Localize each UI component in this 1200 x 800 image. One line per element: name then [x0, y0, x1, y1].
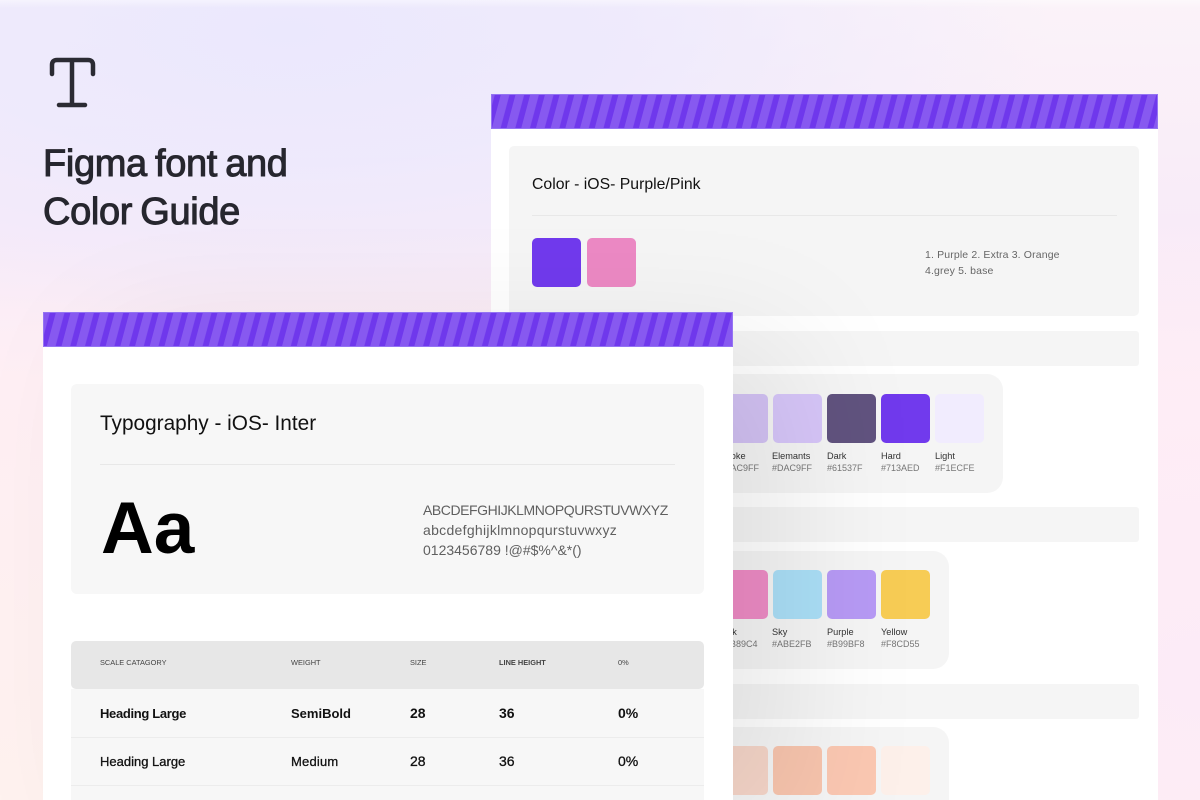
panel: purple palette tray: [640, 374, 1003, 493]
title: [43, 143, 288, 233]
row 1: category: Heading Large: [100, 706, 186, 721]
hex: elements: #DAC9FF: [772, 463, 812, 473]
swatch: peach 4: [881, 746, 930, 795]
glyph set: [423, 502, 668, 558]
swatch: peach 2: [773, 746, 822, 795]
section bar 1: [509, 331, 1139, 366]
swatch: light: [935, 394, 984, 443]
label: purple: Purple: [827, 627, 854, 637]
hex: dark: #61537F: [827, 463, 863, 473]
swatch: pink: [719, 570, 768, 619]
hex: purple: #B99BF8: [827, 639, 865, 649]
title: Color Guide: [43, 191, 240, 233]
label: light: Light: [935, 451, 955, 461]
swatch: sky: [773, 570, 822, 619]
panel: typography specimen: [71, 384, 704, 594]
panel: bright palette tray: [640, 551, 949, 669]
panel: typography card: [43, 312, 733, 800]
panel: color guide card: [491, 94, 1158, 800]
row 2: tracking: 0%: [618, 753, 638, 769]
glyph set: ABCDEFGHIJKLMNOPQURSTUVWXYZ: [423, 502, 668, 518]
color notes: [925, 249, 1060, 277]
striped header: color card: [491, 94, 1158, 129]
swatch: peach 3: [827, 746, 876, 795]
panel: color heading block: [509, 146, 1139, 316]
column: tracking: 0%: [618, 658, 629, 667]
swatch: yellow: [881, 570, 930, 619]
column: line height: LINE HEIGHT: [499, 658, 546, 667]
row 2: category: Heading Large: [100, 754, 185, 769]
section bar 3: [509, 684, 1139, 719]
row 2: weight: Medium: [291, 754, 338, 769]
column: size: SIZE: [410, 658, 426, 667]
row divider: [71, 737, 704, 738]
specimen: Aa: Aa: [101, 488, 194, 569]
row 1: line height: 36: [499, 705, 515, 721]
label: dark: Dark: [827, 451, 846, 461]
label: hard: Hard: [881, 451, 901, 461]
row 1: tracking: 0%: [618, 705, 638, 721]
row 2: line height: 36: [499, 753, 515, 769]
hex: sky: #ABE2FB: [772, 639, 812, 649]
label: yellow: Yellow: [881, 627, 907, 637]
section bar 2: [509, 507, 1139, 542]
label: pink: Pink: [719, 627, 737, 637]
striped header: typography card: [43, 312, 733, 347]
color notes: 1. Purple 2. Extra 3. Orange: [925, 249, 1060, 261]
hex: yellow: #F8CD55: [881, 639, 920, 649]
color notes: 4.grey 5. base: [925, 265, 994, 277]
divider: [532, 215, 1117, 216]
table rows background: [71, 689, 704, 800]
hex: light: #F1ECFE: [935, 463, 975, 473]
row 1: weight: SemiBold: [291, 706, 351, 721]
divider: [100, 464, 675, 465]
column: scale category: SCALE CATAGORY: [100, 658, 167, 667]
heading: typography: Typography - iOS- Inter: [100, 412, 316, 435]
swatch: purple: [532, 238, 581, 287]
glyph set: 0123456789 !@#$%^&*(): [423, 542, 582, 558]
swatch: pink: [587, 238, 636, 287]
row 2: size: 28: [410, 753, 426, 769]
title: Figma font and: [43, 143, 288, 185]
label: elements: Elemants: [772, 451, 810, 461]
swatch: dark: [827, 394, 876, 443]
glyph set: abcdefghijklmnopqurstuvwxyz: [423, 522, 617, 538]
swatch: hard: [881, 394, 930, 443]
hex: stroke: #DAC9FF: [719, 463, 759, 473]
row divider: [71, 785, 704, 786]
label: sky: Sky: [772, 627, 787, 637]
table header: [71, 641, 704, 689]
column: weight: WEIGHT: [291, 658, 321, 667]
panel: orange palette tray: [640, 727, 949, 800]
swatch: elements: [773, 394, 822, 443]
label: stroke: Stroke: [719, 451, 746, 461]
icon: letter T: [50, 58, 96, 108]
hex: pink: #EB89C4: [719, 639, 758, 649]
row 1: size: 28: [410, 705, 426, 721]
swatch: stroke: [719, 394, 768, 443]
swatch: peach 1: [719, 746, 768, 795]
heading: color: Color - iOS- Purple/Pink: [532, 176, 701, 193]
hex: hard: #713AED: [881, 463, 920, 473]
swatch: purple: [827, 570, 876, 619]
